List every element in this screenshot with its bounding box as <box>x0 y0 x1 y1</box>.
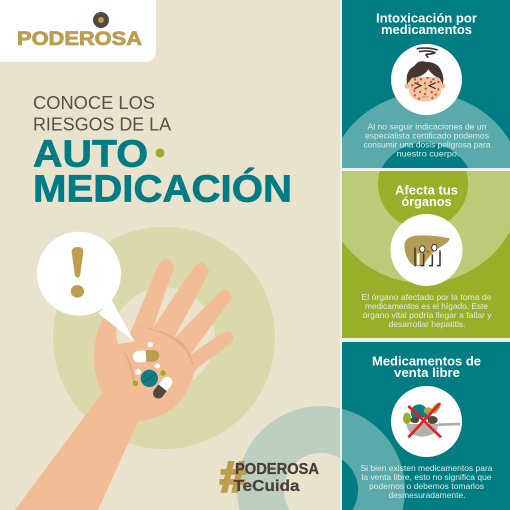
body text <box>360 463 493 500</box>
heading <box>395 184 458 209</box>
title: RIESGOS DE LA <box>33 114 172 134</box>
icon: crossed-out spoon of pills <box>391 386 462 457</box>
body text: la venta libre, esto no significa que <box>362 472 492 482</box>
panel: intoxicación por medicamentos <box>342 0 510 168</box>
heading: medicamentos <box>381 23 472 37</box>
body text: órgano vital podría llegar a fallar y <box>362 310 492 320</box>
background teal ring <box>237 406 340 510</box>
illustration: hand holding pills <box>15 232 233 510</box>
hand <box>15 259 233 510</box>
hashtag PoderosaTeCuida <box>220 454 319 502</box>
body text <box>364 122 491 158</box>
title: AUTO <box>33 134 148 176</box>
heading <box>376 12 477 37</box>
hashtag PoderosaTeCuida: TeCuida <box>234 478 300 495</box>
title: MEDICACIÓN <box>33 166 292 210</box>
body text: nuestro cuerpo. <box>396 148 460 158</box>
body text: especialista certificado podemos <box>365 130 490 140</box>
heading: Intoxicación por <box>376 12 477 26</box>
body text: consumir una dosis peligrosa para <box>364 140 491 150</box>
logo wordmark: PODEROSA <box>17 28 142 50</box>
background target circle <box>53 227 275 449</box>
heading: Afecta tus <box>395 184 458 198</box>
panel: left poster background <box>0 0 340 510</box>
title <box>33 92 292 210</box>
hashtag PoderosaTeCuida: # <box>220 454 246 502</box>
icon: face with rash <box>391 44 462 115</box>
panel: afecta tus órganos <box>342 171 510 338</box>
body text: desmesuradamente. <box>388 490 466 500</box>
body text: Si bien existen medicamentos para <box>360 463 493 473</box>
hashtag PoderosaTeCuida: PODEROSA <box>235 461 319 478</box>
heading <box>372 354 481 380</box>
heading: órganos <box>402 195 452 209</box>
heading: Medicamentos de <box>372 354 481 368</box>
logo mark <box>93 12 109 28</box>
pills <box>132 342 174 401</box>
body text: El órgano afectado por la toma de <box>362 292 492 302</box>
body text <box>362 292 492 329</box>
logo card <box>0 0 156 62</box>
icon: sad liver <box>390 214 462 286</box>
body text: Al no seguir indicaciones de un <box>368 122 487 132</box>
title: CONOCE LOS <box>33 92 155 113</box>
body text: desarrollar hepatitis. <box>388 319 466 329</box>
panel: medicamentos de venta libre <box>342 342 510 510</box>
body text: podemos o debemos tomarlos <box>369 481 485 491</box>
speech bubble with exclamation mark <box>37 232 134 342</box>
body text: medicamentos es el hígado. Este <box>365 301 488 311</box>
heading: venta libre <box>394 366 460 380</box>
